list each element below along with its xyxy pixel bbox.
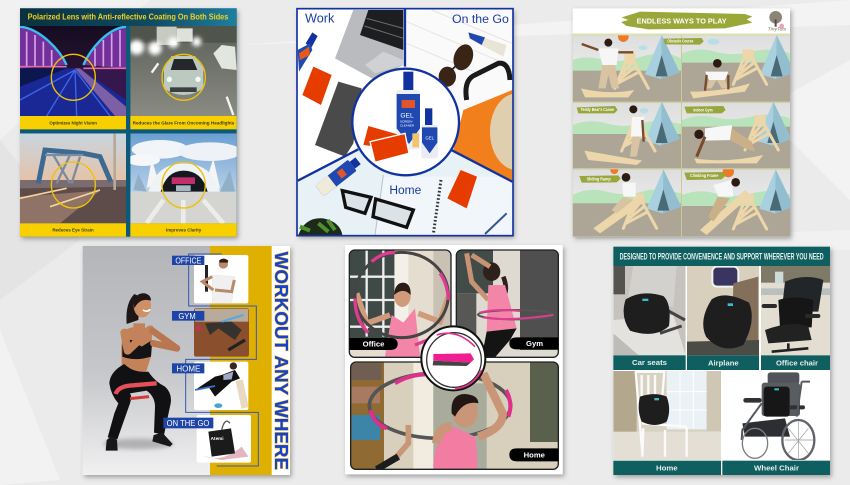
activity labels: Indoor Gym (693, 107, 713, 112)
photo: office (349, 250, 451, 357)
caption bars: Home (656, 463, 678, 472)
panel dividers (298, 9, 512, 182)
caption bars: Car seats (632, 358, 667, 367)
label: on the go: On the Go (452, 12, 509, 26)
activity labels: Climbing Frame (690, 173, 719, 178)
photo: home chair (613, 371, 721, 460)
panel: endless ways to play (573, 8, 795, 237)
caption bars: Airplane (708, 359, 739, 368)
caption bars: Wheel Chair (754, 463, 799, 472)
location tags: ON THE GO (167, 419, 209, 428)
photo: oncoming headlights (129, 26, 237, 116)
caption bars: Optimizes Night Vision (49, 120, 97, 126)
label: home: Home (524, 450, 545, 459)
cell: climbing over board (682, 35, 795, 102)
activity labels: Teddy Bear's Canoe (581, 107, 614, 112)
caption bars: Improves Clarity (166, 228, 202, 234)
large bottle: GEL (400, 112, 414, 119)
centre product circle (421, 326, 485, 390)
cleaning cloths (363, 126, 409, 162)
panel: lumbar support cushion (613, 247, 830, 475)
panel border (297, 9, 513, 236)
heading (613, 247, 830, 266)
caption bars (20, 116, 237, 237)
label: office (349, 338, 398, 350)
photo: night vision bridge (20, 26, 126, 116)
cell: sliding ramp (573, 166, 681, 237)
activity labels: Sliding Ramp (587, 176, 611, 181)
cell: indoor gym (682, 102, 791, 168)
panel heading (20, 8, 237, 26)
photo: on the go bag: Atemi (211, 436, 224, 441)
connector lines (186, 254, 258, 466)
icon: glasses (342, 191, 413, 227)
heading brush banner (621, 12, 752, 29)
photo: gym (456, 250, 558, 357)
photo: office (194, 255, 248, 303)
location tags: OFFICE (175, 257, 201, 266)
label: work: Work (305, 11, 335, 25)
lens circles (51, 54, 205, 208)
caption bars: Office chair (776, 359, 818, 368)
activity labels (577, 38, 726, 183)
logo (768, 11, 787, 33)
label: home (509, 448, 558, 461)
scene: home desk (298, 150, 512, 235)
photo: wheel chair (740, 372, 816, 460)
photo: gym (194, 308, 249, 357)
logo: TinyTots (768, 27, 787, 33)
icon: spray bottle, home (315, 155, 362, 196)
scene: laptop work desk (298, 10, 403, 157)
caption bars (613, 355, 830, 475)
label: office: Office (363, 340, 384, 349)
cell: obstacle course (573, 31, 681, 102)
panel: workout anywhere (83, 246, 292, 475)
label: gym (509, 337, 558, 349)
panel: gel screen cleaner (297, 9, 543, 236)
label: gym: Gym (526, 339, 543, 348)
panel: polarized lens (20, 8, 242, 237)
location tags: GYM (178, 312, 196, 321)
caption bars: Reduces Eye Strain (52, 228, 94, 234)
scene: on the go (406, 10, 512, 182)
small bottle: GEL (425, 135, 435, 140)
cell: teddy bear's canoe (573, 102, 681, 168)
caption bars: Reduces the Glare From Oncoming Headlights (133, 120, 235, 126)
heading brush banner: ENDLESS WAYS TO PLAY (637, 16, 727, 25)
photo: improved clarity plaza (127, 133, 242, 223)
woman doing squat with band (103, 293, 177, 451)
location tags: HOME (176, 364, 200, 373)
label: home: Home (389, 183, 422, 197)
large bottle (396, 72, 420, 149)
photo: home (351, 362, 558, 469)
vertical title: WORKOUT ANY WHERE (271, 252, 292, 470)
photo: eye strain bridge (20, 133, 126, 223)
photo: on the go bag (197, 415, 251, 463)
location tags (163, 256, 213, 428)
cell: climbing frame (682, 166, 794, 237)
large bottle: SCREEN (400, 120, 412, 124)
centre product circle (352, 69, 459, 175)
panel: weighted hoop (345, 245, 563, 474)
photo: home (194, 362, 249, 410)
photo: office chair (761, 266, 830, 355)
photo: airplane (687, 266, 759, 355)
icon: spray bottle, work (298, 32, 318, 72)
photo: car seat (613, 266, 686, 355)
panel heading: Polarized Lens with Anti-reflective Coating On Both Sides (28, 12, 229, 21)
large bottle: CLEANER (400, 124, 415, 128)
activity labels: Obstacle Course (667, 39, 694, 44)
